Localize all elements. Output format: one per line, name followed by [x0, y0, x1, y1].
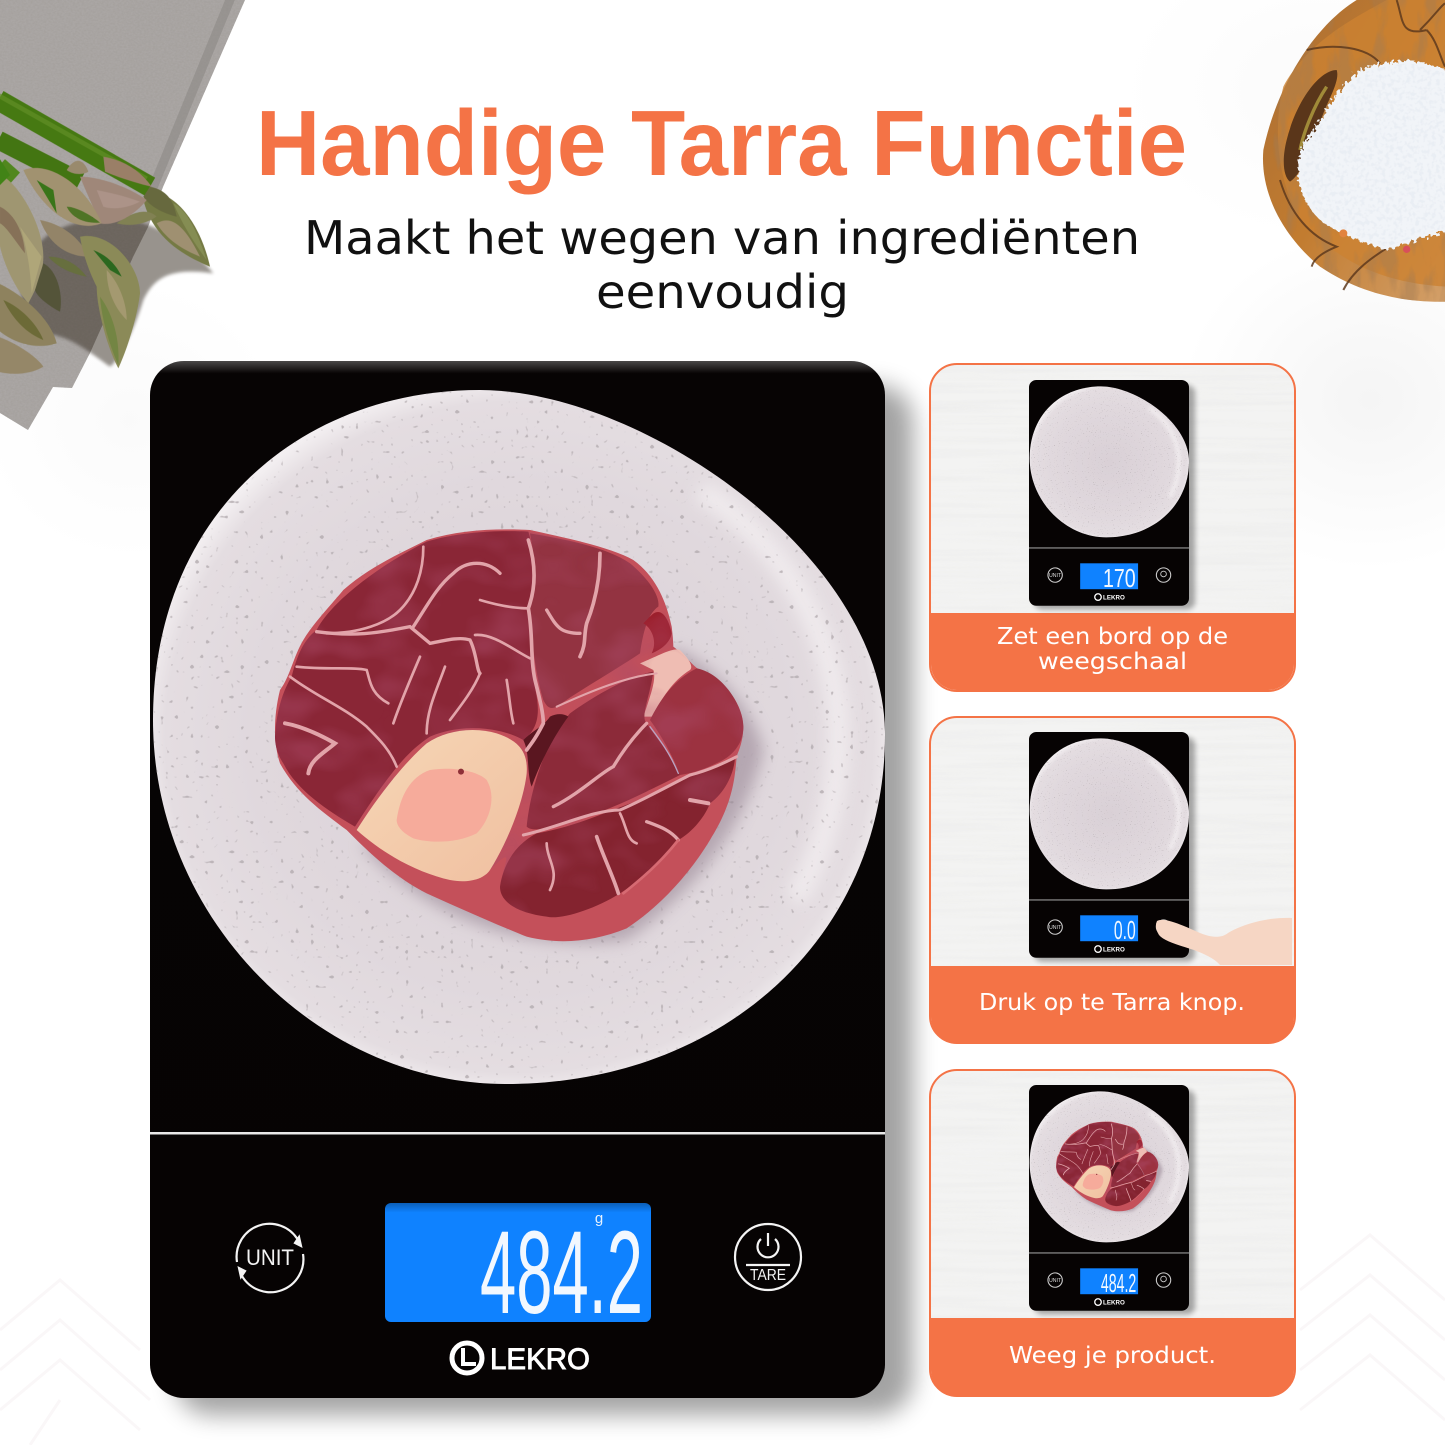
- unit button: UNIT: [246, 1245, 294, 1270]
- mini scale with tared plate: LEKRO: [1103, 946, 1125, 953]
- LEKRO logo: LEKRO: [490, 1343, 590, 1376]
- mini scale with empty plate: 170: [1103, 565, 1136, 593]
- caption: step 1: weegschaal: [1038, 649, 1187, 675]
- photo: green asparagus bunch: [0, 95, 213, 374]
- subtitle: Maakt het wegen van ingrediënten: [304, 211, 1140, 265]
- LCD display reading 484.2 g: [385, 1203, 651, 1339]
- mini scale with meat on plate: [1029, 1085, 1195, 1314]
- mini scale with empty plate: [1029, 380, 1195, 609]
- LCD display reading 484.2 g: g: [595, 1210, 603, 1227]
- photo: wooden spoon with coarse salt: [1262, 0, 1445, 302]
- caption: step 3: Weeg je product.: [1009, 1343, 1216, 1369]
- caption: step 1: [997, 624, 1228, 675]
- icon: hand pressing tare: [1156, 918, 1292, 965]
- tare button: TARE: [750, 1267, 786, 1284]
- plate with speckles: [150, 385, 890, 1090]
- mini scale with tared plate: UNIT: [1049, 925, 1062, 931]
- meat: veal shank with bone: [270, 527, 763, 943]
- panel: step 2 press the tare button: [930, 716, 1295, 1046]
- mini scale with empty plate: LEKRO: [1103, 594, 1125, 601]
- panel: step 1 put a plate on the scale: [930, 363, 1295, 693]
- panel: step 3 weigh the product: [930, 1069, 1295, 1398]
- title: Handige Tarra Functie: [256, 91, 1187, 195]
- subtitle: eenvoudig: [596, 265, 849, 319]
- mini scale with meat on plate: 484.2: [1101, 1270, 1136, 1298]
- mini scale with empty plate: UNIT: [1049, 573, 1062, 579]
- subtitle: [304, 211, 1140, 319]
- photo: folded grey napkin: [0, 0, 250, 435]
- caption: step 2: Druk op te Tarra knop.: [979, 990, 1245, 1016]
- unit button: [237, 1224, 303, 1292]
- main kitchen scale: [150, 361, 913, 1415]
- mini scale with tared plate: 0.0: [1114, 917, 1136, 945]
- caption: step 1: Zet een bord op de: [997, 624, 1228, 650]
- mini scale with tared plate: [1029, 732, 1195, 961]
- mini scale with meat on plate: LEKRO: [1103, 1299, 1125, 1306]
- mini scale with meat on plate: UNIT: [1049, 1278, 1062, 1284]
- tare button: [735, 1224, 801, 1290]
- LCD display reading 484.2 g: 484.2: [480, 1207, 643, 1339]
